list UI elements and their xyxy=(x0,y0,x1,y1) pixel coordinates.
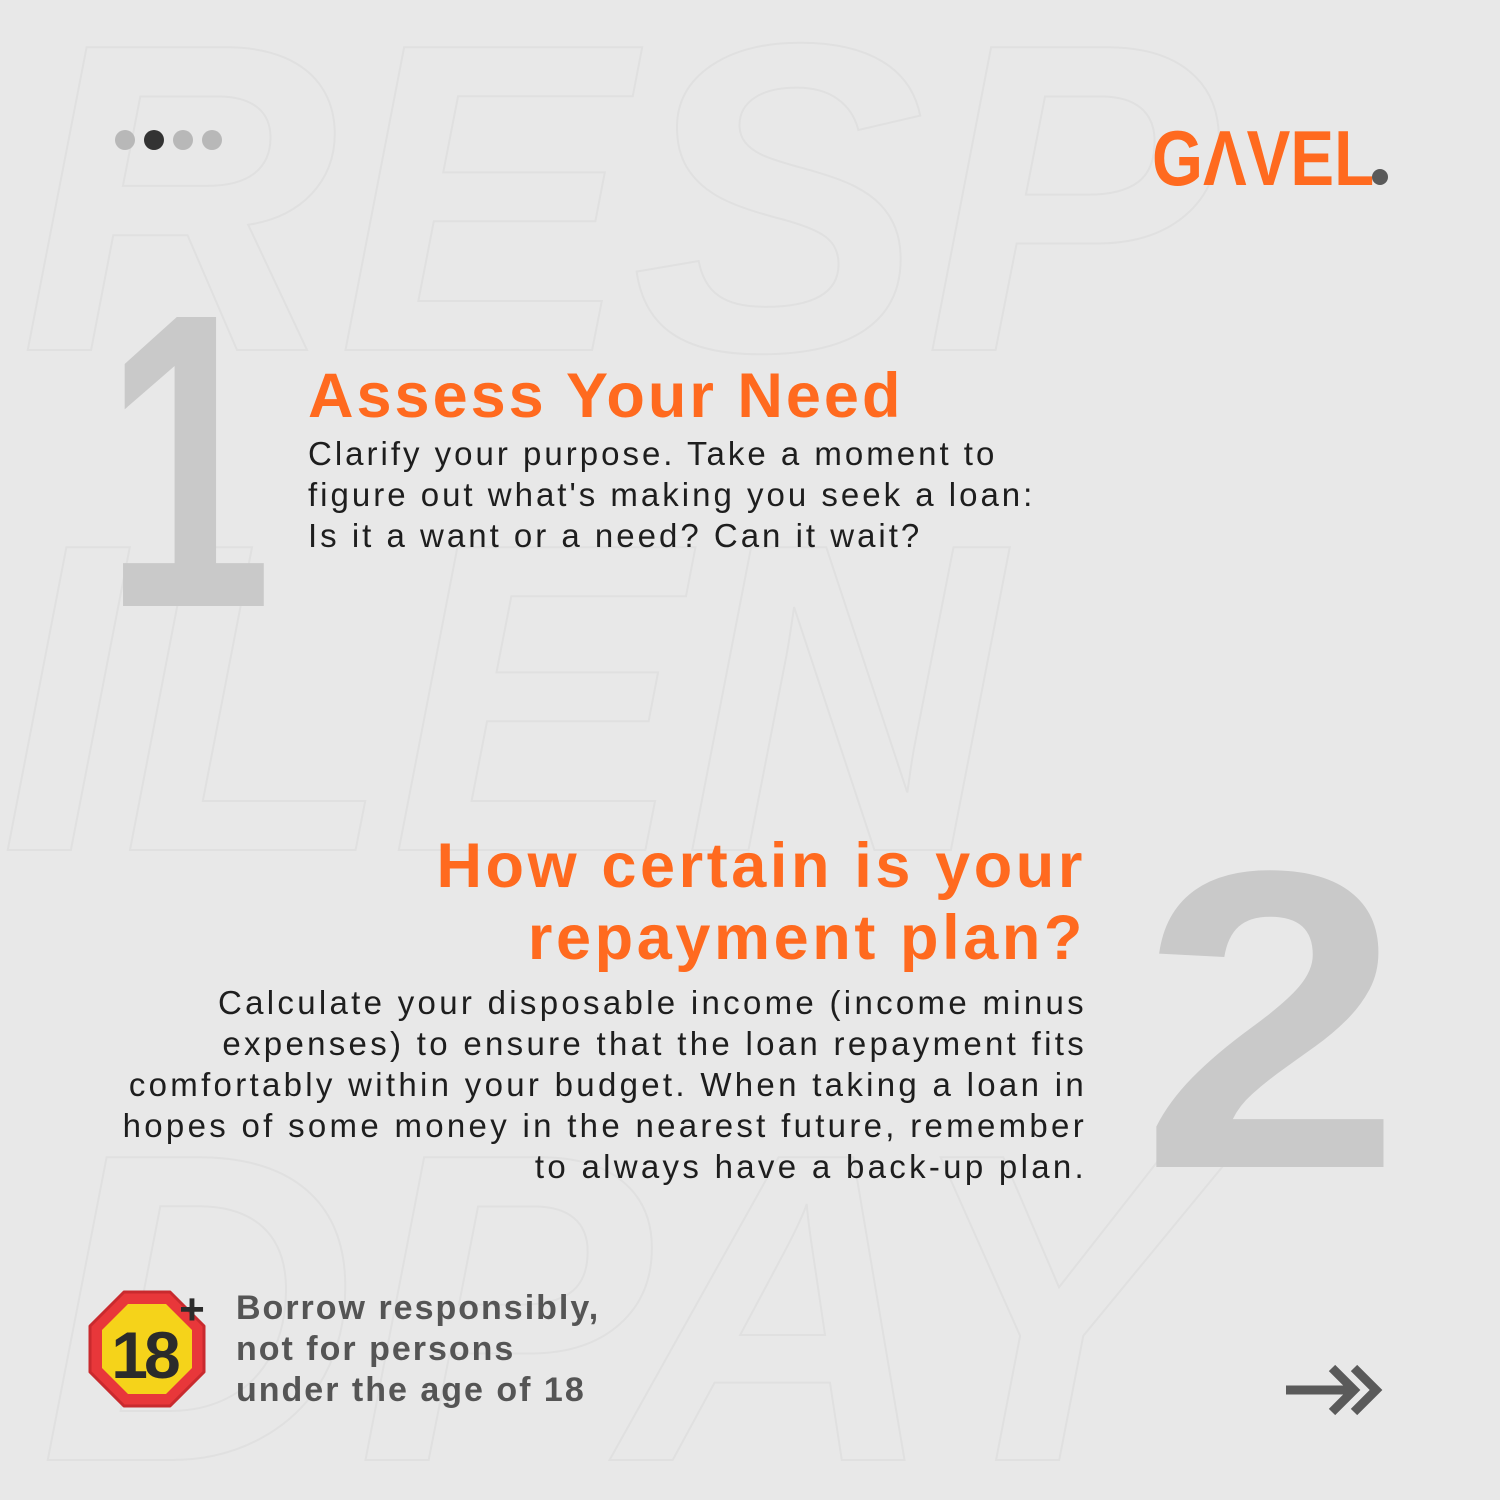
body 1: Is it a want or a need? Can it wait? xyxy=(308,517,922,554)
heading 1: Assess Your Need xyxy=(308,361,903,431)
body 1 xyxy=(308,435,1035,554)
heading 2: How certain is your xyxy=(436,831,1086,901)
logo: GΛVEL xyxy=(1152,114,1374,202)
body 1: figure out what's making you seek a loan: xyxy=(308,476,1035,513)
body 2: Calculate your disposable income (income minus xyxy=(218,984,1087,1021)
footer disclaimer xyxy=(236,1289,600,1409)
big number 2: 2 xyxy=(1140,783,1402,1258)
arrow: next xyxy=(1286,1364,1382,1416)
footer disclaimer: under the age of 18 xyxy=(236,1371,586,1409)
body 2: to always have a back-up plan. xyxy=(535,1148,1087,1185)
heading 2: repayment plan? xyxy=(528,903,1086,973)
body 2: comfortably within your budget. When taking a loan in xyxy=(129,1066,1087,1103)
icon: 18+ badge xyxy=(88,1288,206,1408)
body 2: hopes of some money in the nearest future, remember xyxy=(123,1107,1087,1144)
big number 1: 1 xyxy=(104,227,272,696)
footer disclaimer: Borrow responsibly, xyxy=(236,1289,600,1327)
page indicator dots xyxy=(115,130,222,150)
footer disclaimer: not for persons xyxy=(236,1330,515,1368)
icon: 18+ badge: 18 xyxy=(111,1318,179,1392)
background watermark letters: ILEN xyxy=(0,453,1014,944)
body 1: Clarify your purpose. Take a moment to xyxy=(308,435,997,472)
heading 2 xyxy=(436,831,1086,973)
body 2: expenses) to ensure that the loan repayment fits xyxy=(222,1025,1087,1062)
body 2 xyxy=(123,984,1087,1185)
